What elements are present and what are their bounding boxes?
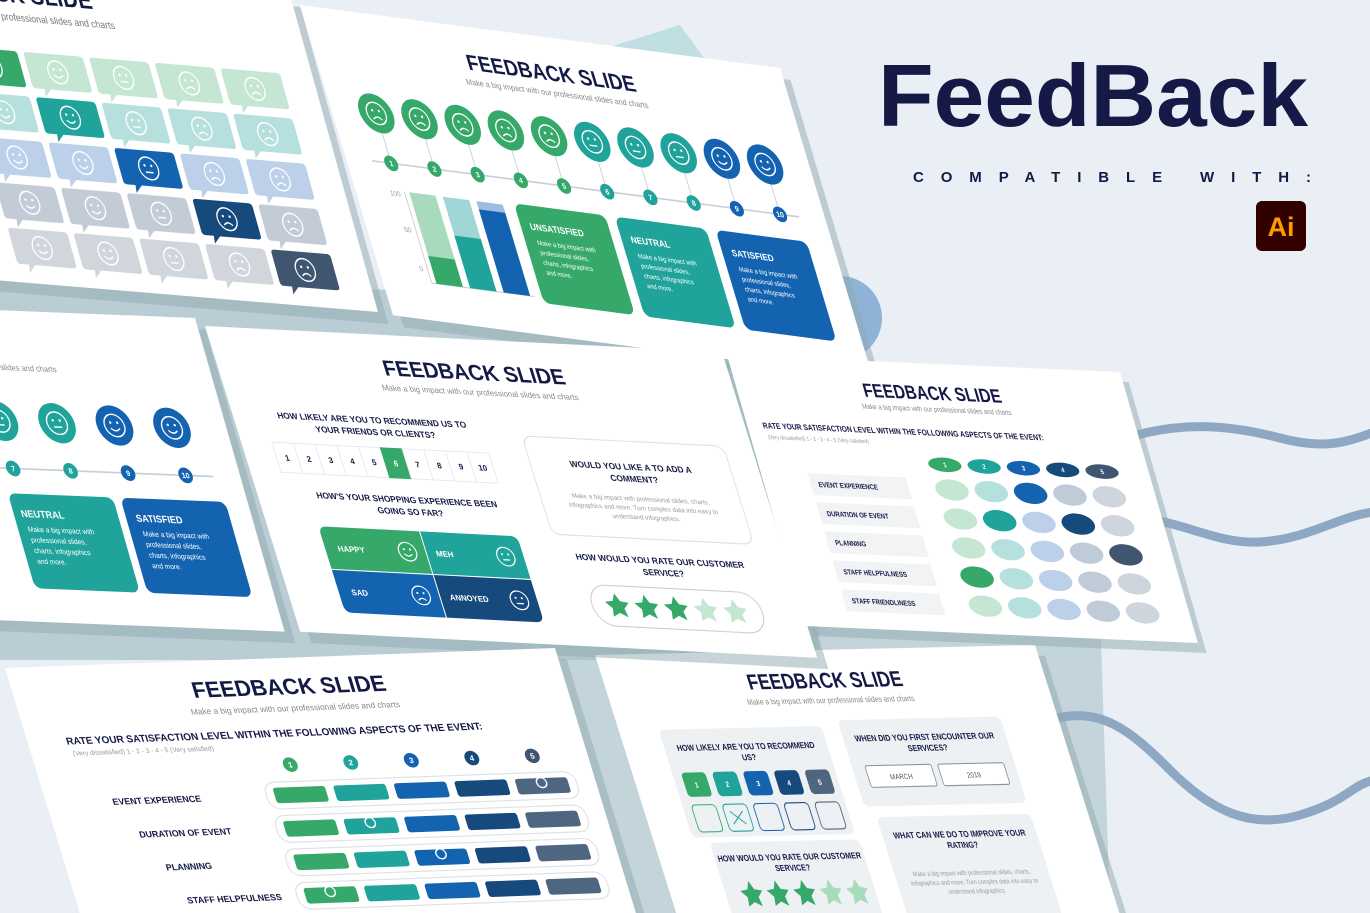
question: shopping experience grid: ANNOYED <box>448 593 490 604</box>
card: star rating: SERVICE? <box>774 863 812 873</box>
card: star rating <box>710 839 886 913</box>
card: satisfied: and more. <box>747 296 775 307</box>
slide: survey cards (bottom-right) <box>595 645 1140 913</box>
question: recommend scale: 1 <box>284 454 291 463</box>
slide: emoji scale with bar chart (top-center) <box>300 5 883 390</box>
question: recommend scale: 4 <box>349 457 357 466</box>
emoji rating scale 1-10: 10 <box>775 209 785 220</box>
card: unsatisfied: professional slides, <box>539 250 590 263</box>
card: satisfied: Make a big impact with <box>142 531 210 541</box>
slide title: FEEDBACK SLIDE <box>860 380 1004 407</box>
card: satisfied: SATISFIED <box>730 248 776 264</box>
question: shopping experience grid: GOING SO FAR? <box>376 505 445 518</box>
card: improve rating: understand infographics. <box>947 887 1008 896</box>
question: shopping experience grid: HAPPY <box>337 544 367 555</box>
slide: satisfaction bars (bottom-left) <box>5 648 662 913</box>
card: neutral: Make a big impact with <box>27 527 95 536</box>
emoji scale 7-10: 7 <box>10 464 16 473</box>
card: neutral: charts, infographics <box>33 548 92 557</box>
slide subtitle: Make a big impact with our professional slides and charts <box>465 77 650 110</box>
card: recommend: 2 <box>725 780 731 789</box>
emoji scale 7-10: 9 <box>125 469 131 478</box>
question: recommend scale: 10 <box>477 463 489 473</box>
comment box: WOULD YOU LIKE A TO ADD A <box>568 459 694 475</box>
emoji rating scale 1-10: 9 <box>734 204 740 214</box>
card: first encounter: SERVICES? <box>906 743 949 753</box>
card: neutral: charts, infographics <box>643 273 695 287</box>
dot matrix: DURATION OF EVENT <box>826 511 891 521</box>
emoji rating scale 1-10: 4 <box>518 176 525 186</box>
slide: emoji scale partial (middle-left) <box>0 298 295 643</box>
dot matrix: 2 <box>982 463 987 471</box>
card: first encounter <box>837 716 1027 807</box>
card: first encounter: MARCH <box>889 772 914 781</box>
card: satisfied: professional slides, <box>145 542 203 551</box>
dot matrix: 4 <box>1060 467 1066 475</box>
question: shopping experience grid <box>307 490 544 623</box>
card: first encounter: WHEN DID YOU FIRST ENCOUNTER OUR <box>853 731 996 744</box>
heading: RATE YOUR SATISFACTION LEVEL WITHIN THE FOLLOWING ASPECTS OF THE EVENT: <box>65 722 484 748</box>
question: star rating: SERVICE? <box>641 567 686 579</box>
dot matrix: PLANNING <box>834 540 867 549</box>
emoji scale 7-10: 8 <box>67 466 74 476</box>
card: recommend: 4 <box>786 779 792 788</box>
bubble grid <box>0 46 342 298</box>
dot matrix: 1 <box>942 462 948 469</box>
emoji rating scale 1-10: 1 <box>388 159 395 168</box>
bar rating rows <box>101 747 612 913</box>
card: first encounter: 2019 <box>966 771 982 780</box>
title: FeedBack <box>878 46 1309 145</box>
bar rating rows: DURATION OF EVENT <box>138 826 233 840</box>
question: star rating <box>574 552 769 634</box>
card: recommend: US? <box>741 753 758 763</box>
card: unsatisfied: and more. <box>545 270 573 280</box>
card: satisfied: professional slides, <box>741 276 792 290</box>
card: unsatisfied: Make a big impact with <box>536 240 597 255</box>
slide subtitle: Make a big impact with our professional slides and charts <box>381 383 580 402</box>
emoji rating scale 1-10 <box>351 91 802 225</box>
card: improve rating: infographics and more. Turn complex data into easy to <box>910 877 1040 888</box>
card: improve rating: RATING? <box>946 840 980 850</box>
bar rating rows: PLANNING <box>164 861 213 872</box>
bar rating rows: 3 <box>408 756 415 765</box>
card: neutral: and more. <box>646 283 674 293</box>
card: recommend: HOW LIKELY ARE YOU TO RECOMMEND <box>676 740 816 753</box>
icon: Adobe Illustrator: Ai <box>1268 212 1294 242</box>
comment box: COMMENT? <box>609 473 660 485</box>
wavy lines <box>1050 427 1370 820</box>
emoji rating scale 1-10: 5 <box>561 181 567 191</box>
card: recommend: 3 <box>755 780 761 788</box>
question: recommend scale: 8 <box>436 461 443 471</box>
card: satisfied <box>716 230 837 342</box>
bar rating rows: 4 <box>468 754 476 763</box>
dot matrix: 5 <box>1100 469 1105 476</box>
question: recommend scale: 9 <box>458 462 465 472</box>
emoji rating scale 1-10: 6 <box>604 187 611 197</box>
stacked bar chart <box>389 190 535 297</box>
slide: satisfaction bars (bottom-left): (Very dissatisfied) 1 - 2 - 3 - 4 - 5 (Very satisfied) <box>72 746 215 758</box>
bar rating rows: 1 <box>287 760 294 769</box>
card: improve rating: WHAT CAN WE DO TO IMPROVE YOUR <box>892 828 1027 841</box>
card: unsatisfied: charts, infographics <box>542 260 594 273</box>
dot matrix: 3 <box>1021 465 1027 473</box>
card: neutral: NEUTRAL <box>20 509 66 522</box>
slide: satisfaction dot matrix (middle-right) <box>727 355 1207 653</box>
emoji rating scale 1-10: 8 <box>690 198 697 208</box>
card: improve rating <box>876 814 1063 913</box>
emoji scale 7-10 <box>0 398 215 484</box>
card: satisfied: and more. <box>151 563 183 571</box>
comment box: understand infographics. <box>612 513 682 523</box>
slide subtitle: Make a big impact with our professional slides and charts <box>746 694 916 707</box>
comment box: Make a big impact with professional slides, charts, <box>571 493 711 507</box>
dot matrix <box>801 451 1162 625</box>
slide: survey questions (middle-center) <box>205 326 828 669</box>
question: recommend scale: 5 <box>371 458 378 467</box>
dot matrix: STAFF FRIENDLINESS <box>851 598 917 608</box>
card: satisfied: SATISFIED <box>135 513 184 527</box>
comment box: infographics and more. Turn complex data into easy to <box>568 502 720 516</box>
slide title: FEEDBACK SLIDE <box>744 668 906 695</box>
card: neutral: Make a big impact with <box>637 253 698 268</box>
card: satisfied <box>120 498 253 597</box>
slide title: FEEDBACK SLIDE <box>188 670 389 703</box>
question: recommend scale: HOW LIKELY ARE YOU TO RECOMMEND US TO <box>276 410 468 430</box>
subtitle: compatible with: COMPATIBLE WITH: <box>913 169 1311 186</box>
question: recommend scale: 7 <box>414 460 422 469</box>
stacked bar chart: 100 <box>389 190 402 199</box>
card: neutral <box>615 217 736 328</box>
card: recommend <box>658 726 855 838</box>
emoji rating scale 1-10: 7 <box>647 193 654 202</box>
slide subtitle: Make a big impact with our professional slides and charts <box>189 699 401 717</box>
emoji scale 7-10: 10 <box>180 471 191 480</box>
card: neutral: NEUTRAL <box>629 234 672 250</box>
bar rating rows: STAFF HELPFULNESS <box>186 892 283 905</box>
dot matrix: STAFF HELPFULNESS <box>843 569 909 579</box>
emoji rating scale 1-10: 2 <box>431 164 438 174</box>
card: neutral: professional slides, <box>30 537 88 547</box>
question: shopping experience grid: SAD <box>350 588 369 598</box>
comment box <box>522 436 754 544</box>
dot matrix: EVENT EXPERIENCE <box>818 482 879 492</box>
slide title: FEEDBACK SLIDE <box>379 355 568 390</box>
card: satisfied: charts, infographics <box>744 286 796 300</box>
card: neutral <box>8 493 140 593</box>
card: satisfied: charts, infographics <box>148 552 207 562</box>
bar rating rows: EVENT EXPERIENCE <box>111 794 202 807</box>
card: star rating: HOW WOULD YOU RATE OUR CUSTOMER <box>716 851 863 864</box>
question: recommend scale: 6 <box>392 459 400 468</box>
question: recommend scale <box>262 410 498 483</box>
bar rating rows: 5 <box>529 752 536 761</box>
slide title: FEEDBACK SLIDE <box>463 50 639 97</box>
card: recommend: 5 <box>817 778 823 787</box>
question: recommend scale: YOUR FRIENDS OR CLIENTS? <box>314 424 437 440</box>
slide subtitle: Make a big impact with our professional slides and charts <box>861 403 1013 417</box>
emoji rating scale 1-10: 3 <box>474 170 481 180</box>
question: recommend scale: 3 <box>327 456 335 465</box>
stacked bar chart: 50 <box>404 226 413 235</box>
decorative shapes <box>0 25 1110 913</box>
icon: Adobe Illustrator <box>1256 201 1306 251</box>
stacked bar chart: 0 <box>419 266 424 273</box>
bar rating rows: 2 <box>347 758 355 767</box>
card: improve rating: Make a big impact with professional slides, charts, <box>912 868 1032 878</box>
card: recommend: 1 <box>694 781 700 790</box>
question: shopping experience grid: MEH <box>435 549 455 559</box>
card: unsatisfied: UNSATISFIED <box>528 221 586 239</box>
heading: RATE YOUR SATISFACTION LEVEL WITHIN THE FOLLOWING ASPECTS OF THE EVENT: <box>761 421 1045 443</box>
card: satisfied: Make a big impact with <box>738 266 799 281</box>
question: recommend scale: 2 <box>306 455 313 464</box>
question: shopping experience grid: HOW'S YOUR SHOPPING EXPERIENCE BEEN <box>315 490 498 509</box>
card: neutral: professional slides, <box>640 263 691 277</box>
slide: satisfaction dot matrix (middle-right): (Very dissatisfied) 1 - 2 - 3 - 4 - 5 (Very satisfied) <box>767 435 870 446</box>
slide: emoji bubble grid (top-left) <box>0 0 388 324</box>
card: neutral: and more. <box>36 558 68 567</box>
card: unsatisfied <box>514 203 635 315</box>
question: star rating: HOW WOULD YOU RATE OUR CUSTOMER <box>574 552 746 570</box>
